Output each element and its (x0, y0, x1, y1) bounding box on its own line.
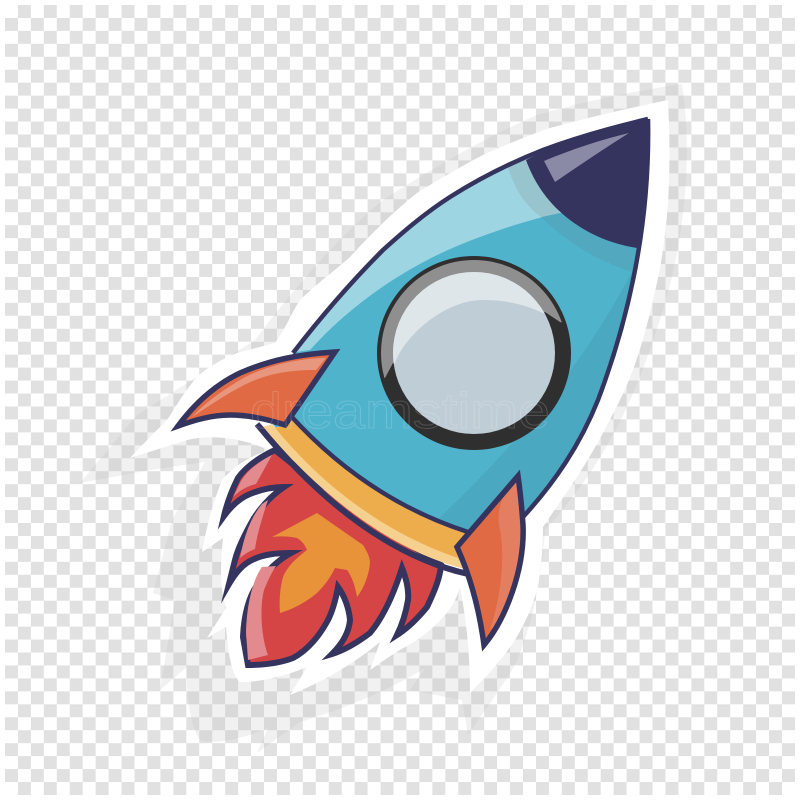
shaded band below nose (541, 213, 640, 272)
flame body (224, 450, 441, 665)
drop shadow (80, 84, 687, 753)
porthole ring reflection (381, 260, 562, 378)
fin highlight (192, 358, 326, 417)
glass highlight (393, 272, 545, 364)
body side shading (439, 272, 632, 530)
watermark: dreamstime (250, 383, 550, 439)
collar outlines (290, 415, 468, 532)
body outline (293, 119, 648, 517)
body light reflection (296, 156, 562, 352)
flame (224, 450, 441, 665)
nose cone (526, 119, 648, 248)
white sticker border (130, 100, 669, 695)
collar highlight (263, 424, 465, 569)
right fin highlight (490, 482, 520, 630)
inner flame (272, 513, 370, 613)
porthole outer ring (377, 256, 571, 450)
left fin (178, 352, 335, 426)
nose highlight (544, 133, 629, 182)
right fin (457, 476, 530, 645)
flame highlights (233, 455, 272, 497)
rocket body (268, 119, 660, 540)
collar band (257, 415, 468, 574)
porthole glass (393, 272, 555, 434)
porthole window (375, 250, 571, 450)
